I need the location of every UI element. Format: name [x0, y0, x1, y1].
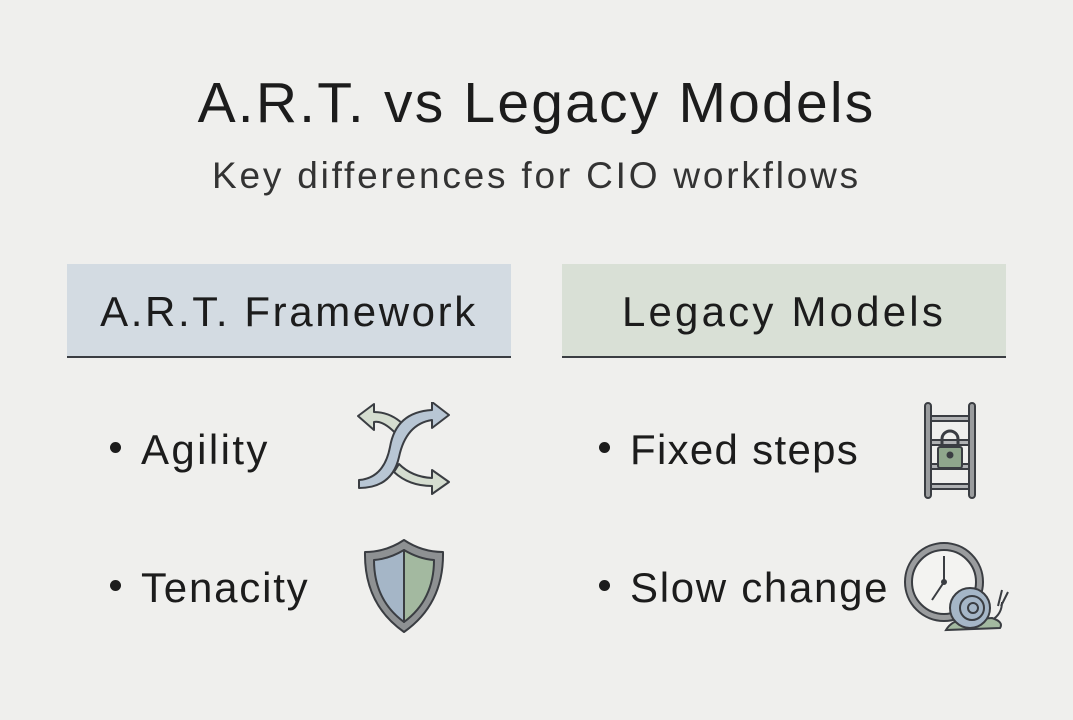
- title: A.R.T. vs Legacy Models: [198, 71, 875, 135]
- icon: shuffle arrows: [357, 402, 450, 495]
- bullet: Agility: Agility: [141, 426, 270, 473]
- bullet: Fixed steps: Fixed steps: [630, 426, 859, 473]
- icon: clock with snail: [904, 542, 1009, 632]
- header: A.R.T. Framework: [67, 264, 511, 358]
- bullet: Slow change: Slow change: [630, 564, 889, 611]
- header: A.R.T. Framework: A.R.T. Framework: [100, 288, 478, 335]
- header: Legacy Models: Legacy Models: [622, 288, 946, 335]
- bullet: Tenacity: Tenacity: [141, 564, 309, 611]
- header: Legacy Models: [562, 264, 1006, 358]
- icon: ladder with lock: [924, 402, 976, 499]
- subtitle: Key differences for CIO workflows: [212, 155, 861, 196]
- icon: shield: [364, 539, 444, 633]
